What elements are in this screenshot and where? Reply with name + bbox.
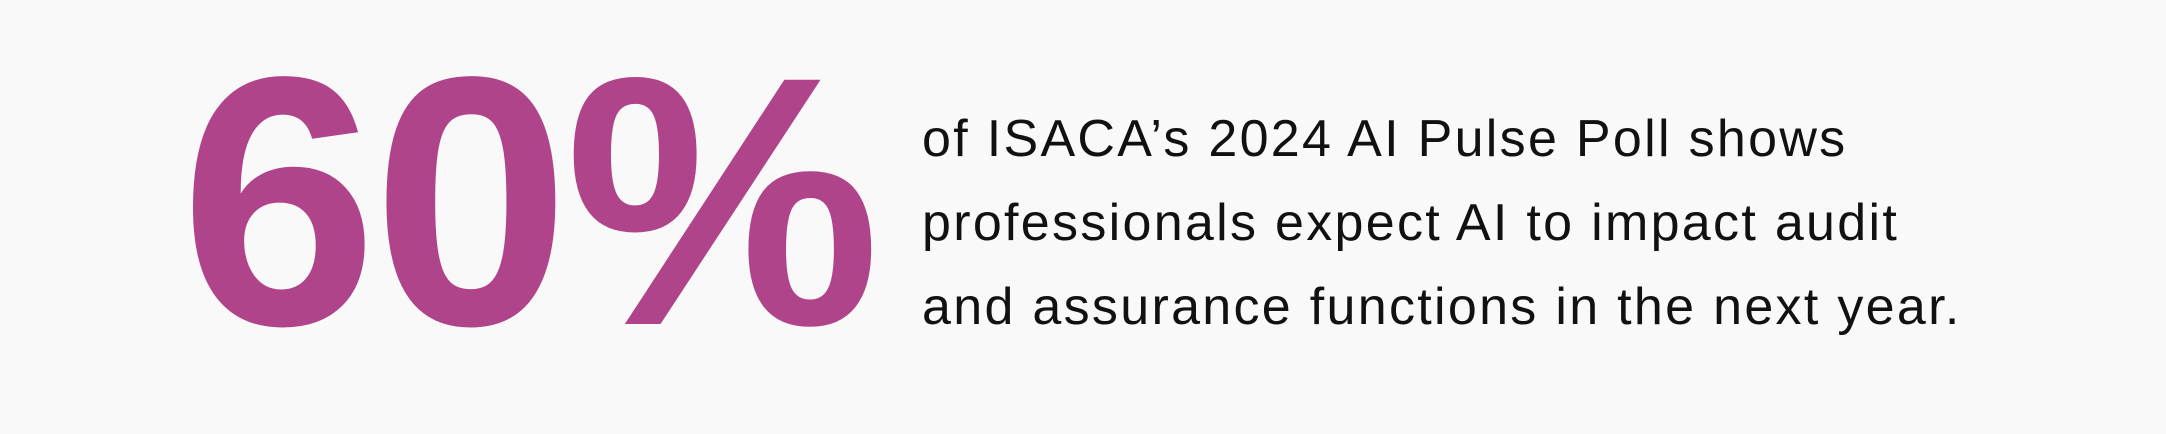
description text block: and assurance functions in the next year.	[922, 278, 1962, 336]
big stat: 60%: 60%	[180, 4, 876, 400]
description text block: of ISACA’s 2024 AI Pulse Poll shows	[922, 110, 1847, 168]
description text block	[922, 110, 1962, 336]
description text block: professionals expect AI to impact audit	[922, 194, 1899, 252]
